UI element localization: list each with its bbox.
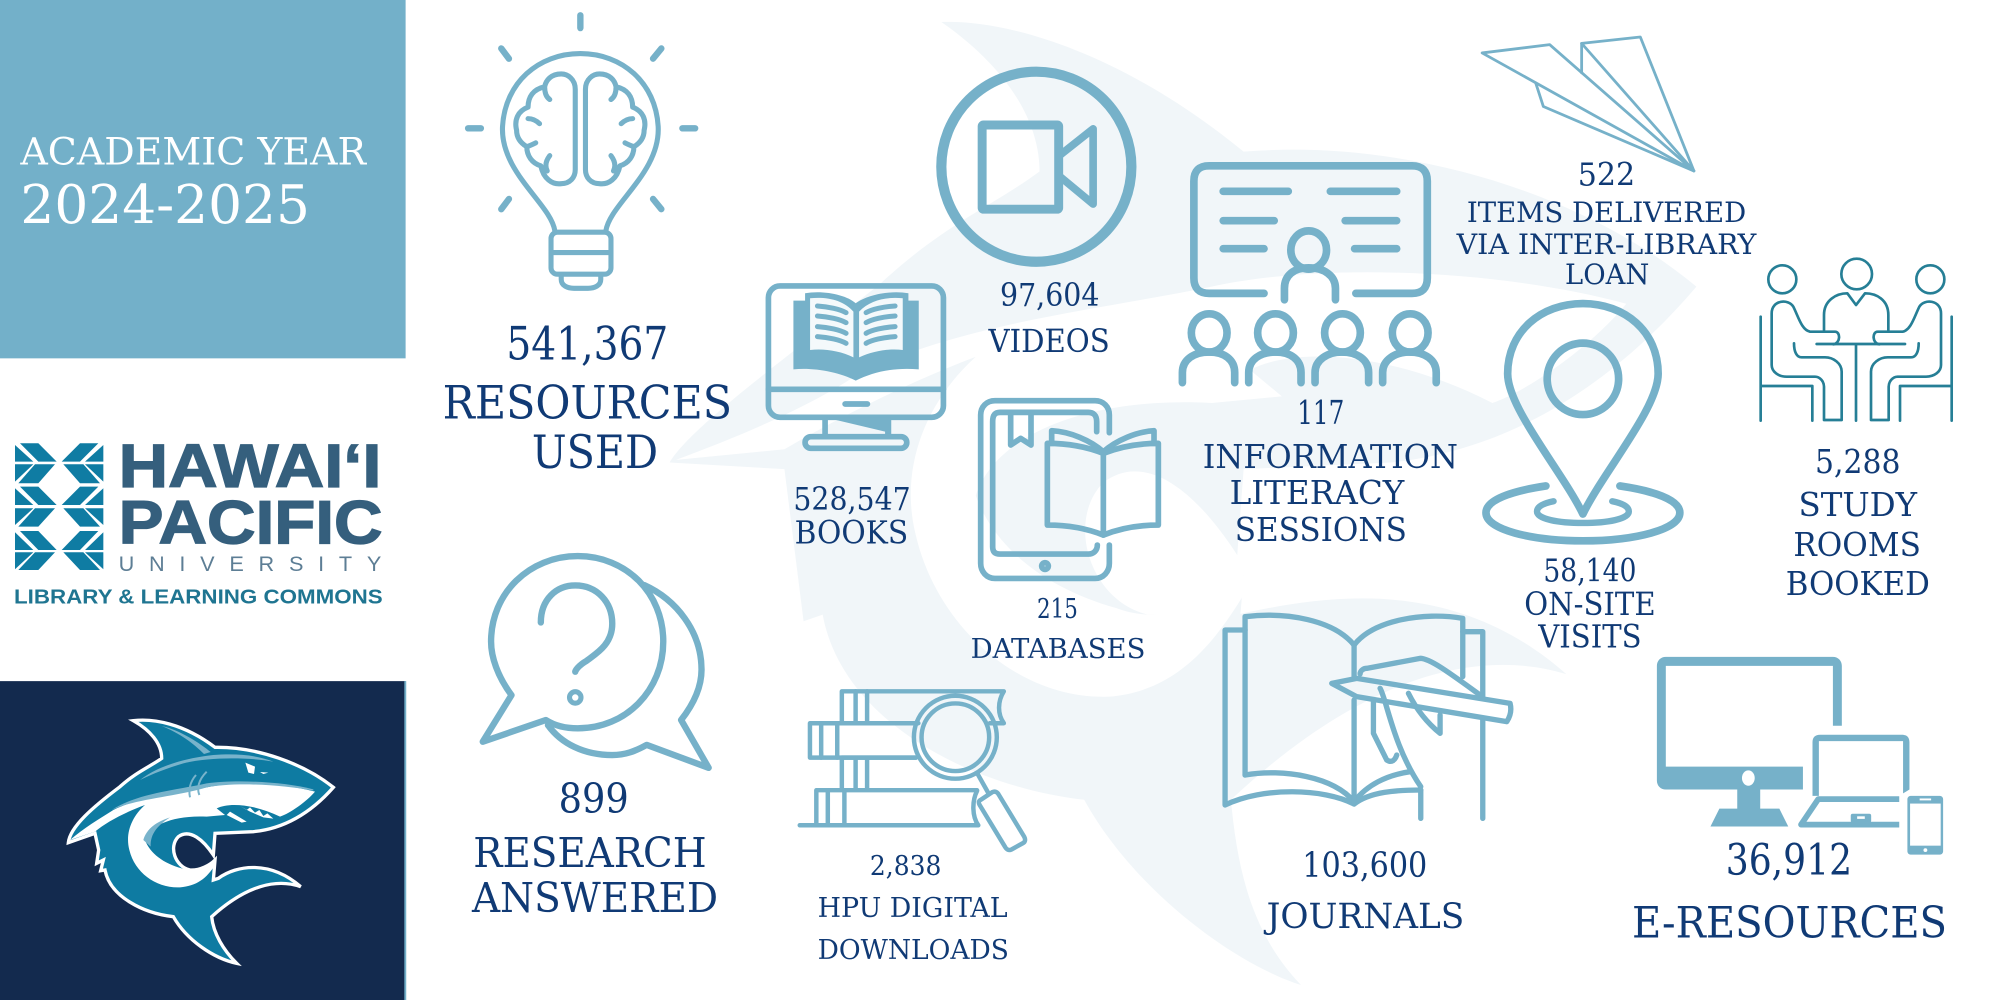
- icon: paper plane: [1482, 37, 1694, 171]
- icon: open book with writing hand: [1225, 615, 1511, 818]
- stat: videos: [941, 72, 1131, 360]
- stat: research answered: [471, 556, 718, 922]
- number: 215: 215: [1037, 594, 1078, 625]
- stat: e-resources: [1632, 657, 1947, 948]
- number: 528,547: 528,547: [793, 480, 911, 518]
- panel: academic year: [0, 0, 406, 358]
- icon: monitor with open book: [768, 286, 943, 448]
- panel: university logo: [0, 358, 406, 681]
- number: 899: 899: [559, 775, 629, 823]
- label: study: STUDY: [1798, 485, 1918, 524]
- number: 36,912: 36,912: [1726, 836, 1852, 886]
- number: 103,600: 103,600: [1302, 846, 1427, 886]
- icon: logo chevron pattern: [15, 443, 103, 570]
- icon: location pin: [1486, 304, 1680, 541]
- stat: resources used: [443, 15, 732, 479]
- icon: lightbulb with brain: [468, 15, 695, 288]
- label: used: USED: [532, 425, 658, 479]
- stat: information literacy sessions: [1182, 166, 1458, 549]
- stat: books: [768, 286, 943, 551]
- icon: people at table: [1761, 259, 1952, 421]
- logo text: University: UNIVERSITY: [119, 551, 381, 576]
- stat: study rooms booked: [1761, 259, 1952, 603]
- label: items delivered: ITEMS DELIVERED: [1467, 196, 1746, 229]
- label: answered: ANSWERED: [471, 874, 718, 922]
- stat: inter-library loan: [1456, 37, 1757, 291]
- number: 2,838: 2,838: [870, 851, 941, 882]
- logo text: Pacific: PACIFIC: [119, 488, 383, 556]
- icon: tablet with open book: [981, 401, 1158, 578]
- label: visits: VISITS: [1537, 617, 1642, 655]
- number: 58,140: 58,140: [1543, 552, 1636, 590]
- number: 117: 117: [1297, 393, 1344, 432]
- label: rooms: ROOMS: [1793, 525, 1921, 564]
- icon: shark logo: [68, 720, 333, 963]
- label: databases: DATABASES: [971, 634, 1145, 665]
- label: literacy: LITERACY: [1230, 473, 1405, 512]
- icon: video camera in circle: [941, 72, 1131, 262]
- label: via inter-library: VIA INTER-LIBRARY: [1456, 228, 1757, 261]
- label: resources: RESOURCES: [443, 375, 732, 429]
- icon: presentation board and audience: [1182, 166, 1436, 383]
- number: 97,604: 97,604: [1000, 276, 1099, 314]
- label: e-resources: E-RESOURCES: [1632, 899, 1947, 949]
- label: journals: JOURNALS: [1264, 897, 1464, 937]
- label: downloads: DOWNLOADS: [818, 935, 1009, 966]
- label: information: INFORMATION: [1203, 437, 1458, 476]
- number: 522: 522: [1578, 156, 1635, 194]
- stat: on-site visits: [1486, 304, 1680, 655]
- number: 541,367: 541,367: [506, 317, 668, 371]
- label: loan: LOAN: [1565, 258, 1649, 291]
- icon: monitor, laptop and phone: [1657, 657, 1943, 855]
- logo text: Library and Learning Commons: LIBRARY & LEARNING COMMONS: [14, 586, 383, 608]
- label: videos: VIDEOS: [988, 322, 1110, 360]
- icon: speech bubbles with question mark: [483, 556, 709, 768]
- panel: shark mascot: [0, 681, 406, 1000]
- heading: 2024-2025: 2024-2025: [20, 173, 310, 236]
- logo text: Hawaii: HAWAIʻI: [119, 432, 381, 500]
- heading: academic year: ACADEMIC YEAR: [19, 131, 367, 174]
- label: research: RESEARCH: [473, 829, 707, 877]
- stat: journals: [1225, 615, 1511, 937]
- icon: books and magnifier: [800, 691, 1025, 850]
- label: hpu digital: HPU DIGITAL: [818, 893, 1008, 924]
- label: sessions: SESSIONS: [1235, 510, 1407, 549]
- number: 5,288: 5,288: [1815, 442, 1901, 481]
- label: books: BOOKS: [795, 513, 908, 551]
- stat: databases: [971, 401, 1158, 665]
- label: booked: BOOKED: [1786, 564, 1930, 603]
- label: on-site: ON-SITE: [1524, 585, 1656, 623]
- watermark shark: [670, 22, 1696, 985]
- stat: digital downloads: [800, 691, 1025, 966]
